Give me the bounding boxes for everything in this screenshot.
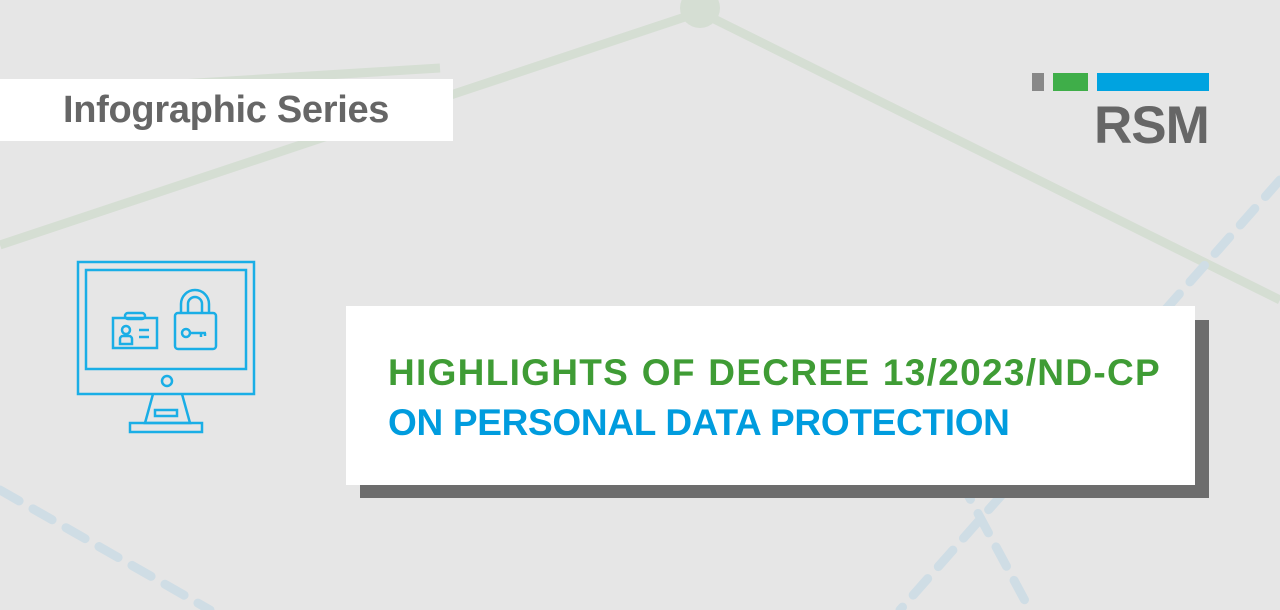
title line 2: ON PERSONAL DATA PROTECTION: [388, 402, 1010, 443]
logo: RSM: RSM: [1094, 96, 1209, 155]
icon: computer monitor with ID card and lock: [76, 260, 256, 434]
lock: [175, 313, 216, 349]
header label: Infographic Series: [0, 79, 453, 141]
title box: [346, 306, 1195, 485]
logo: RSM: [1032, 73, 1209, 155]
ID card: [113, 318, 157, 348]
title line 1: HIGHLIGHTS OF DECREE 13/2023/ND-CP: [388, 352, 1161, 393]
title shadow: [360, 320, 1209, 498]
header label: Infographic Series: Infographic Series: [63, 89, 389, 131]
